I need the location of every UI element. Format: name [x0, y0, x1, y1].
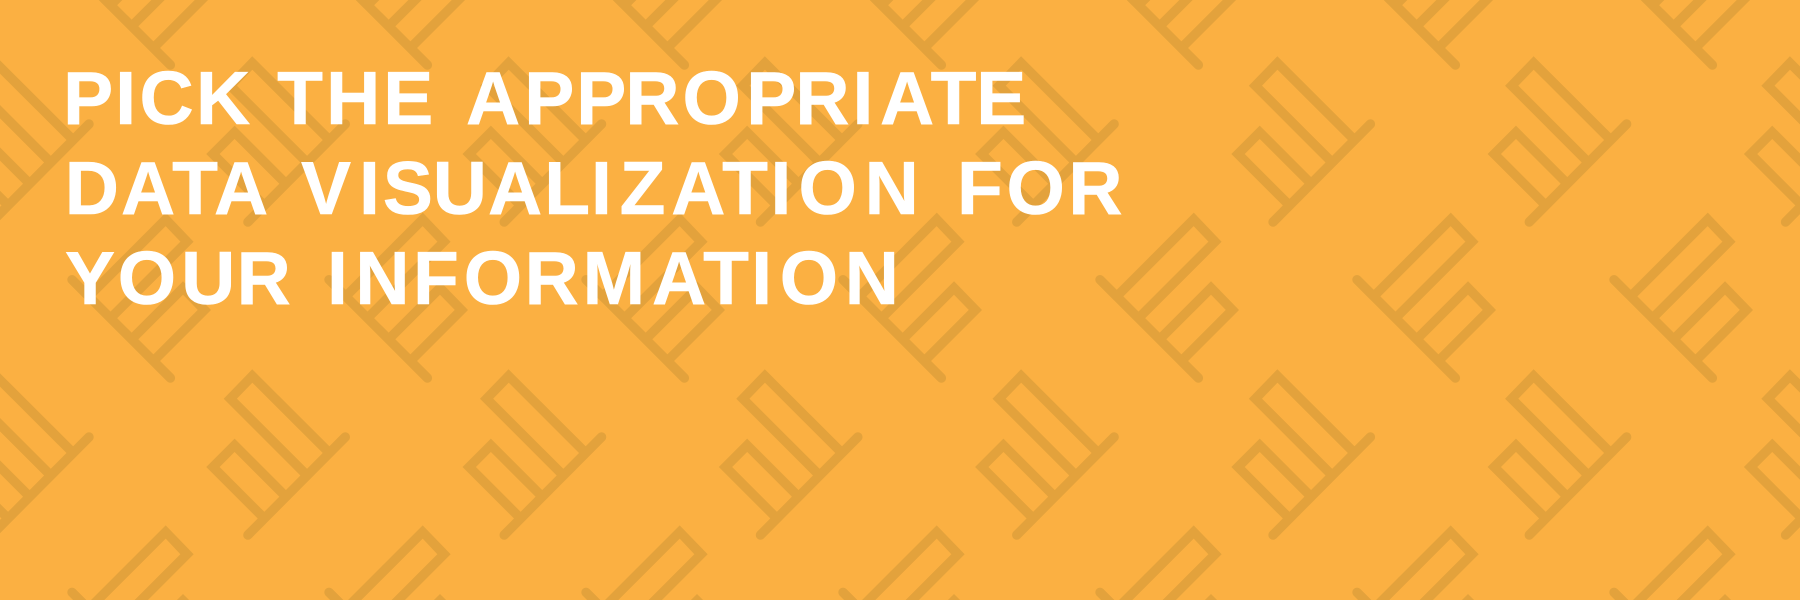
- title: [63, 56, 1123, 320]
- title: YOUR INFORMATION: [65, 236, 899, 320]
- title: DATA VISUALIZATION FOR: [65, 146, 1123, 230]
- title: PICK THE APPROPRIATE: [63, 56, 1026, 140]
